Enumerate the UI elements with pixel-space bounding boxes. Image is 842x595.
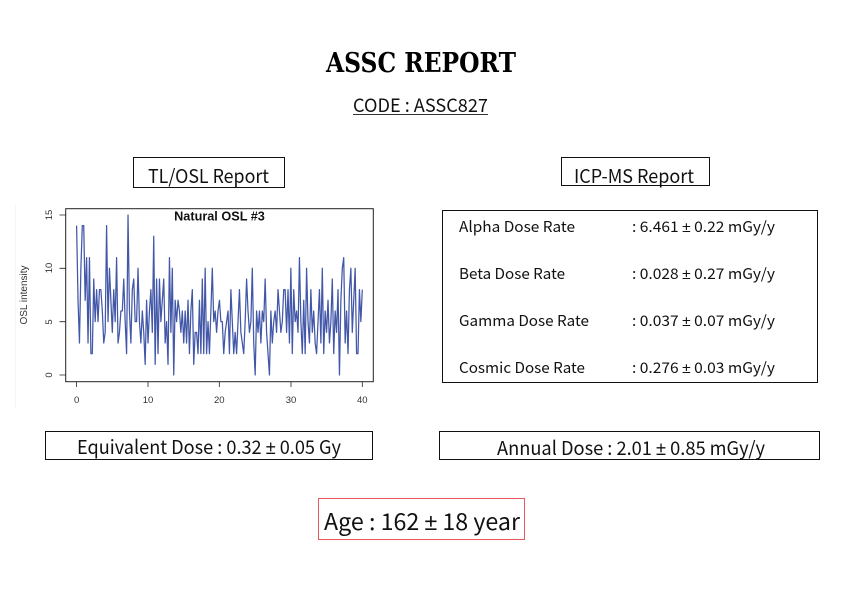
alpha dose rate: : 6.461 ± 0.22 mGy/y — [632, 216, 775, 237]
annual dose — [440, 432, 820, 461]
cosmic dose rate: : 0.276 ± 0.03 mGy/y — [632, 357, 775, 378]
data line — [77, 215, 362, 375]
beta dose rate: Beta Dose Rate — [459, 263, 565, 284]
heading: TL/OSL report: TL/OSL Report — [148, 162, 269, 189]
annual dose: Annual Dose : 2.01 ± 0.85 mGy/y — [497, 434, 765, 461]
x axis: 20 — [214, 395, 225, 406]
alpha dose rate — [459, 216, 775, 237]
gamma dose rate: Gamma Dose Rate — [459, 310, 589, 331]
x axis: 40 — [357, 395, 368, 406]
title: ASSC REPORT — [325, 48, 516, 79]
equivalent dose: Equivalent Dose : 0.32 ± 0.05 Gy — [77, 433, 341, 460]
x axis: 30 — [286, 395, 296, 406]
chart title: Natural OSL #3 — [174, 210, 265, 224]
alpha dose rate: Alpha Dose Rate — [459, 216, 575, 237]
gamma dose rate: : 0.037 ± 0.07 mGy/y — [632, 310, 775, 331]
panel: dose rates — [442, 210, 818, 382]
beta dose rate: : 0.028 ± 0.27 mGy/y — [632, 263, 775, 284]
y axis: 10 — [44, 263, 55, 273]
heading: ICP-MS report: ICP-MS Report — [574, 162, 694, 189]
y axis: 15 — [44, 210, 55, 220]
y axis: OSL intensity — [19, 265, 30, 325]
gamma dose rate — [459, 310, 775, 331]
y axis — [19, 210, 362, 387]
report code: CODE : ASSC827 — [353, 92, 488, 118]
x axis — [74, 395, 368, 406]
cosmic dose rate: Cosmic Dose Rate — [459, 357, 585, 378]
x axis: 0 — [74, 395, 79, 406]
age result: Age : 162 ± 18 year — [324, 503, 520, 537]
x axis: 10 — [143, 395, 153, 406]
y axis: 0 — [44, 372, 55, 378]
y axis: 5 — [44, 319, 55, 325]
beta dose rate — [459, 263, 775, 284]
chart: natural OSL intensity — [15, 205, 373, 408]
cosmic dose rate — [459, 357, 775, 378]
